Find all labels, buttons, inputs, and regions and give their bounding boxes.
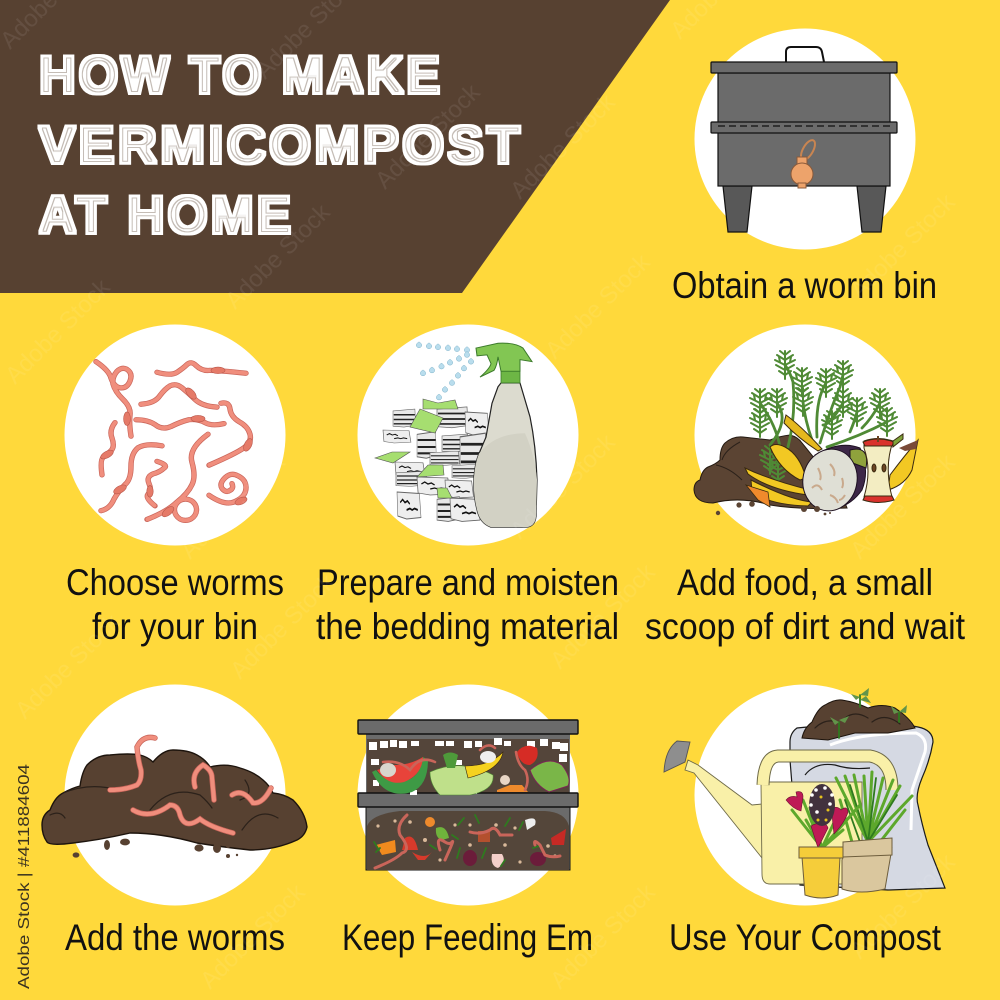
icon: tap [791,138,818,188]
watermark: Adobe Stock [845,848,961,964]
circle [358,684,578,906]
title [39,46,523,245]
bag [790,720,945,890]
icon: shredded paper [375,399,489,521]
banana peels [745,415,918,506]
carrot tops [750,351,897,484]
caption: Use Your Compost [669,917,942,958]
icon: soil mound with worms [42,737,307,858]
watermark: Adobe Stock [195,878,311,994]
caption [316,562,619,647]
caption [645,562,966,647]
watermark: Adobe Stock [10,608,126,724]
eggplant [797,444,867,516]
beige pot [842,848,892,892]
circle [694,324,916,546]
icon: worms [96,362,254,520]
sprouts [830,688,907,738]
step: add the worms [42,684,307,958]
caption: Add the worms [65,917,285,958]
watering can [664,741,892,884]
soil [802,700,915,740]
watermark: Adobe Stock [845,448,961,564]
caption: Keep Feeding Em [342,917,593,958]
circle [64,684,286,906]
header banner [0,0,670,293]
icon: food scraps and dirt [694,351,918,516]
circle [358,324,578,546]
title: AT HOME [39,186,294,245]
step: choose worms [64,324,286,647]
watermark: Adobe Stock [175,448,291,564]
title: HOW TO MAKE [39,46,443,105]
grass [836,772,912,842]
caption: for your bin [92,606,258,647]
icon: spray droplets [416,342,474,400]
step: prepare bedding [316,324,619,647]
watermark: Adobe Stock [220,198,336,314]
watermark: Adobe Stock [505,428,621,544]
circle [694,28,916,250]
watermark: Adobe Stock [225,568,341,684]
tulips [786,784,860,848]
icon: layered bin with food [358,720,578,870]
caption: Choose worms [66,562,284,603]
caption: Prepare and moisten [317,562,619,603]
watermark: Adobe Stock [0,273,116,389]
circle [64,324,286,546]
step: obtain a worm bin [672,28,937,306]
watermark: Adobe Stock [370,78,486,194]
watermark: Adobe Stock [545,878,661,994]
caption: scoop of dirt and wait [645,606,966,647]
watermark: Adobe Stock [845,188,961,304]
soil crumbs [716,501,831,515]
upper tray food [369,738,569,795]
icon: spray bottle [474,343,537,527]
caption: the bedding material [316,606,619,647]
title: VERMICOMPOST [39,116,523,175]
watermark: Adobe Stock [545,558,661,674]
lower tray compost [374,815,566,868]
caption: Add food, a small [677,562,933,603]
caption: Obtain a worm bin [672,265,937,306]
step: use your compost [664,684,945,958]
step: keep feeding [342,684,593,958]
caption [66,562,284,647]
step: add food [645,324,966,647]
soil [694,435,847,509]
stock id: Adobe Stock | #411884604 [16,764,33,989]
watermark: Adobe Stock [540,248,656,364]
yellow pot [802,857,840,898]
icon: worm bin [711,47,897,232]
icon: compost bag, watering can and plants [664,688,945,898]
watermark: Adobe Stock [505,88,621,204]
apple core [863,434,903,502]
circle [694,684,916,906]
hyacinth [809,784,835,826]
